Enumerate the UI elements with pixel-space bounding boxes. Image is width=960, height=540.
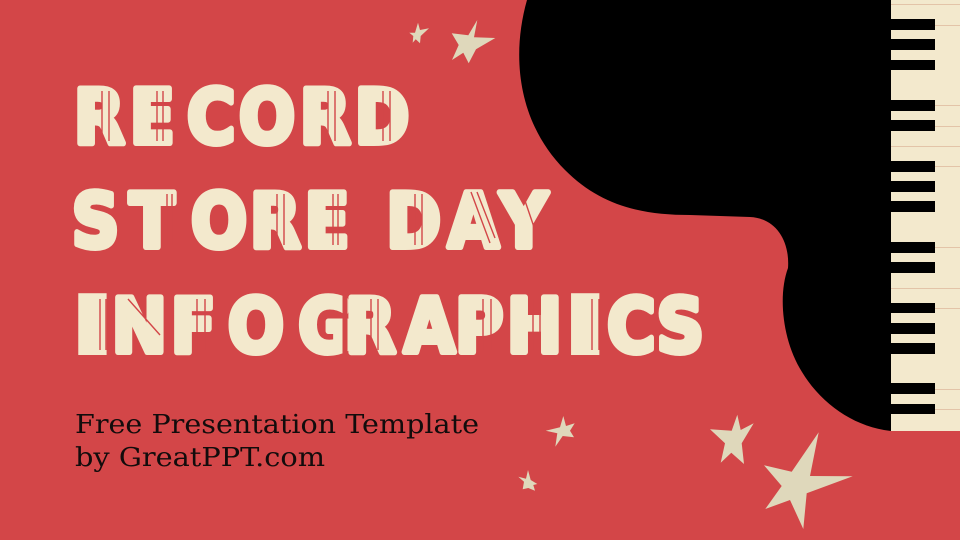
- title: CS: [607, 282, 704, 370]
- stars: [409, 20, 853, 529]
- title: STORE DAY: [0, 177, 548, 265]
- title: I: [84, 294, 101, 357]
- title: I: [576, 294, 594, 357]
- subtitle: Free Presentation Template: [75, 410, 479, 440]
- title: RECORD: [74, 73, 409, 161]
- piano keyboard: [891, 0, 960, 431]
- subtitle: [75, 410, 479, 473]
- subtitle: by GreatPPT.com: [75, 443, 325, 473]
- title: NFOGRAPH: [112, 282, 562, 370]
- piano body: [519, 0, 891, 431]
- title: [0, 73, 704, 370]
